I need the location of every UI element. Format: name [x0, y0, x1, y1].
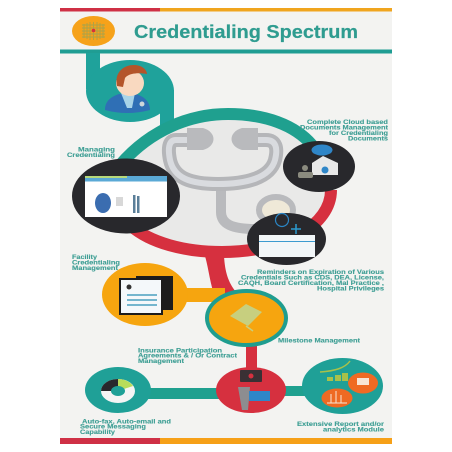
label: cloud documents: for Credentialing — [329, 130, 388, 137]
connector and doctor blob — [86, 53, 174, 125]
label: insurance: Management — [138, 358, 185, 365]
label: insurance: Insurance Participation — [138, 347, 222, 354]
connector: facility to milestone — [175, 288, 225, 302]
label: managing credentialing: Managing — [78, 146, 115, 153]
red stalk — [205, 256, 236, 300]
title: Credentialing Spectrum — [134, 22, 358, 42]
label: messaging: Capability — [80, 429, 116, 436]
connector: milestone to red circle — [246, 345, 257, 370]
label: cloud documents: Complete Cloud based — [307, 119, 388, 126]
circle: analytics — [302, 358, 383, 414]
connector: teal right — [282, 386, 307, 396]
logo — [72, 16, 115, 46]
label: managing credentialing: Credentialing — [67, 152, 115, 159]
background panel — [60, 9, 392, 444]
label: analytics: analytics Module — [323, 426, 385, 433]
circle: cloud documents — [283, 141, 355, 192]
connector: teal left — [145, 388, 220, 399]
circle: facility credentialing — [102, 263, 188, 326]
stethoscope — [169, 128, 293, 229]
circle: messaging — [85, 367, 151, 413]
label: reminders: Hospital Privileges — [317, 286, 385, 292]
bottom colour bar — [60, 438, 392, 444]
label: cloud documents: Documents Management — [300, 124, 389, 132]
label: managing credentialing — [67, 146, 115, 159]
label: reminders: Credentials Such as CDS, DEA, License, — [241, 274, 384, 282]
ring: red lower arc — [130, 190, 331, 252]
label: facility — [72, 254, 120, 272]
circle: managing credentialing — [72, 158, 180, 234]
label: cloud documents — [300, 119, 389, 142]
label: facility: Credentialing — [72, 260, 120, 267]
ring: teal upper arc — [120, 114, 312, 165]
label: analytics — [297, 421, 385, 433]
label: messaging: Secure Messaging — [80, 424, 146, 431]
top colour bar — [60, 8, 392, 12]
icon: doctor — [105, 65, 150, 113]
label: reminders — [238, 269, 385, 292]
label: insurance — [138, 347, 238, 365]
teal header rule — [60, 50, 392, 54]
label: facility: Management — [72, 265, 119, 272]
label: facility: Facility — [72, 254, 97, 261]
label: reminders: CAQH, Board Certification, Mal Practice , — [238, 280, 384, 287]
label: cloud documents: Documents — [348, 136, 388, 142]
circle: agreements — [216, 367, 286, 413]
label: milestone: Milestone Management — [278, 338, 361, 345]
circle: reminders — [247, 213, 326, 265]
circle: milestone — [207, 291, 286, 345]
label: messaging — [80, 418, 171, 436]
label: messaging: Auto-fax, Auto-email and — [82, 418, 171, 425]
ring interior — [115, 114, 331, 252]
label: insurance: Agreements & / Or Contract — [138, 353, 238, 360]
label: reminders: Reminders on Expiration of Various — [257, 269, 385, 276]
label: analytics: Extensive Report and/or — [297, 421, 385, 428]
